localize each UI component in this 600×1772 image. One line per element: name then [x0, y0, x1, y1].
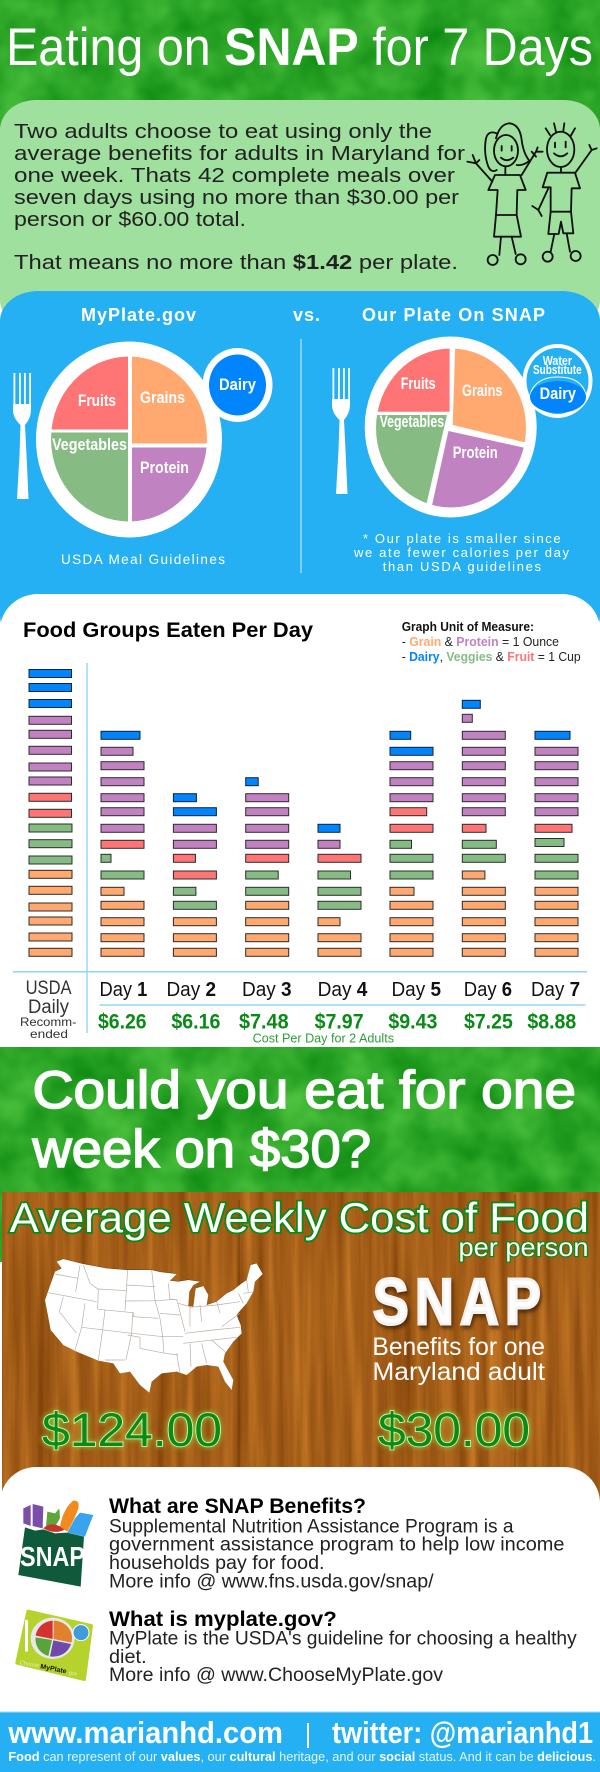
- label: Vegetables: Vegetables: [380, 412, 444, 431]
- text: website: www.marianhd.com: [7, 1715, 283, 1750]
- heading: question: week on $30?: [31, 1120, 371, 1179]
- bars: day 5: [390, 731, 433, 956]
- figure: $124.00: $124.00: [42, 1403, 222, 1456]
- labels: cost per day: [98, 1010, 577, 1034]
- footnote: smaller plate: we ate fewer calories per day: [353, 545, 570, 560]
- icon: stick figure man: [532, 123, 597, 262]
- chart: dairy circle left: [202, 348, 272, 422]
- legend: graph unit of measure: [402, 620, 581, 664]
- heading: MyPlate.gov: MyPlate.gov: [81, 305, 196, 325]
- heading: question: [31, 1061, 576, 1179]
- icon: SNAP logo: [18, 1501, 93, 1587]
- chart: SNAP plate: [365, 336, 537, 518]
- label: Fruits: Fruits: [78, 391, 116, 410]
- heading: vs.: vs.: [293, 305, 320, 325]
- text: benefits for one Maryland adult: Benefits for one: [372, 1333, 545, 1361]
- icon: MyPlate logo: Choose: [19, 1660, 40, 1669]
- text block: what is myplate.gov: More info @ www.ChooseMyPlate.gov: [109, 1665, 444, 1686]
- text: tagline: Food can represent of our values, our cultural heritage, and our social status. And it can be delicious.: [8, 1750, 596, 1764]
- label: Grains: Grains: [462, 381, 502, 400]
- footnote: smaller plate: than USDA guidelines: [383, 559, 542, 574]
- text: benefits for one Maryland adult: Maryland adult: [372, 1358, 545, 1386]
- label: USDA daily recommended: Recomm-: [20, 1015, 76, 1029]
- labels: cost per day: $6.26: [98, 1010, 147, 1034]
- bars: day 4: [318, 824, 361, 956]
- figure: $30.00: $30.00: [378, 1403, 530, 1456]
- label: USDA daily recommended: ended: [30, 1027, 68, 1041]
- bars: USDA daily recommended: [29, 670, 72, 956]
- legend: graph unit of measure: - Dairy, Veggies & Fruit = 1 Cup: [402, 650, 581, 664]
- labels: day axis: Day 4: [318, 979, 368, 1001]
- label: Fruits: Fruits: [401, 374, 436, 393]
- heading: Food Groups Eaten Per Day: Food Groups Eaten Per Day: [23, 619, 313, 642]
- text block: introduction: Two adults choose to eat using only the: [14, 120, 432, 143]
- bars: day 6: [462, 700, 505, 956]
- text: benefits for one Maryland adult: [372, 1333, 545, 1386]
- legend: graph unit of measure: Graph Unit of Measure:: [402, 620, 534, 634]
- icon: stick figure woman: [467, 123, 543, 265]
- icon: MyPlate logo: [17, 1612, 91, 1679]
- text block: what are SNAP benefits: households pay for food.: [109, 1553, 324, 1574]
- chart: dairy circle left: Dairy: [219, 375, 256, 394]
- text block: introduction: average benefits for adults in Maryland for: [14, 142, 465, 165]
- labels: cost per day: $8.88: [527, 1010, 577, 1034]
- icon: map of the United States: [45, 1259, 263, 1393]
- text block: introduction: one week. Thats 42 complete meals over: [14, 164, 455, 187]
- bars: day 2: [173, 794, 216, 956]
- icon: SNAP logo: SNAP: [20, 1541, 85, 1572]
- logo text: SNAP: SNAP: [373, 1265, 547, 1338]
- text block: introduction: [14, 120, 465, 274]
- heading: question: Could you eat for one: [32, 1061, 576, 1120]
- text block: introduction: That means no more than $1.42 per plate.: [14, 251, 458, 274]
- label: Protein: Protein: [140, 458, 189, 477]
- label: Protein: Protein: [453, 443, 498, 462]
- labels: cost per day: $7.25: [464, 1010, 513, 1034]
- bars: day 3: [246, 778, 289, 956]
- labels: day axis: Day 3: [242, 979, 292, 1001]
- labels: day axis: Day 6: [464, 979, 512, 1001]
- icon: fork left: [13, 373, 31, 499]
- top lettuce background: [0, 0, 600, 145]
- label: USDA daily recommended: USDA: [26, 978, 72, 999]
- text block: what is myplate.gov: diet.: [109, 1647, 147, 1668]
- label: Grains: Grains: [140, 388, 185, 407]
- text block: what are SNAP benefits: government assistance program to help low income: [109, 1534, 564, 1556]
- text block: what are SNAP benefits: Supplemental Nutrition Assistance Program is a: [109, 1516, 514, 1538]
- text block: what are SNAP benefits: [109, 1495, 564, 1592]
- label: USDA daily recommended: Daily: [28, 997, 69, 1018]
- chart: dairy and water circle right: Substitute: [533, 363, 582, 377]
- icon: MyPlate logo: .gov: [67, 1670, 78, 1678]
- chart: dairy and water circle right: Water: [543, 354, 572, 368]
- caption: USDA Meal Guidelines: USDA Meal Guidelines: [61, 552, 225, 567]
- heading: average weekly cost of food: Average Weekly Cost of Food: [10, 1194, 589, 1241]
- text block: introduction: person or $60.00 total.: [14, 208, 246, 231]
- caption: cost per day for 2 adults: Cost Per Day for 2 Adults: [253, 1030, 394, 1046]
- chart: recommended plate: [36, 342, 222, 538]
- label: USDA daily recommended: [20, 978, 76, 1041]
- panel: introduction: [0, 100, 600, 330]
- panel: plate comparison: [0, 291, 600, 646]
- bars: day 1: [101, 731, 144, 956]
- labels: cost per day: $7.48: [239, 1010, 289, 1034]
- icon: fork right: [332, 368, 350, 494]
- footer: [0, 1712, 600, 1772]
- labels: day axis: Day 2: [166, 979, 216, 1001]
- panel: information: [0, 1467, 600, 1727]
- labels: day axis: Day 7: [531, 979, 580, 1001]
- footnote: smaller plate: * Our plate is smaller since: [363, 531, 561, 546]
- subheading: per person: per person: [458, 1232, 588, 1262]
- labels: cost per day: $7.97: [315, 1010, 364, 1034]
- chart: dairy and water circle right: [522, 344, 592, 418]
- legend: graph unit of measure: - Grain & Protein = 1 Ounce: [402, 635, 559, 649]
- chart: dairy and water circle right: Dairy: [540, 384, 576, 403]
- labels: cost per day: $6.16: [171, 1010, 220, 1034]
- text block: introduction: seven days using no more than $30.00 per: [14, 186, 459, 209]
- title: Eating on SNAP for 7 Days: [6, 18, 593, 77]
- footnote: smaller plate: [353, 531, 570, 574]
- bars: day 7: [535, 731, 578, 956]
- text block: what is myplate.gov: MyPlate is the USDA's guideline for choosing a healthy: [109, 1628, 577, 1650]
- labels: day axis: [100, 979, 580, 1001]
- text block: what are SNAP benefits: What are SNAP Benefits?: [109, 1495, 366, 1518]
- panel: average weekly cost of food: [2, 1192, 600, 1502]
- heading: Our Plate On SNAP: Our Plate On SNAP: [362, 305, 545, 325]
- labels: day axis: Day 5: [392, 979, 441, 1001]
- text block: what is myplate.gov: [109, 1608, 577, 1686]
- panel: food groups chart: [0, 594, 600, 1074]
- panel: could you eat question: [0, 1047, 600, 1262]
- text block: what is myplate.gov: What is myplate.gov?: [109, 1608, 337, 1631]
- labels: cost per day: $9.43: [388, 1010, 437, 1034]
- label: Vegetables: Vegetables: [52, 435, 127, 454]
- labels: day axis: Day 1: [100, 979, 147, 1001]
- icon: MyPlate logo: MyPlate: [40, 1663, 67, 1675]
- text block: what are SNAP benefits: More info @ www.fns.usda.gov/snap/: [109, 1572, 434, 1592]
